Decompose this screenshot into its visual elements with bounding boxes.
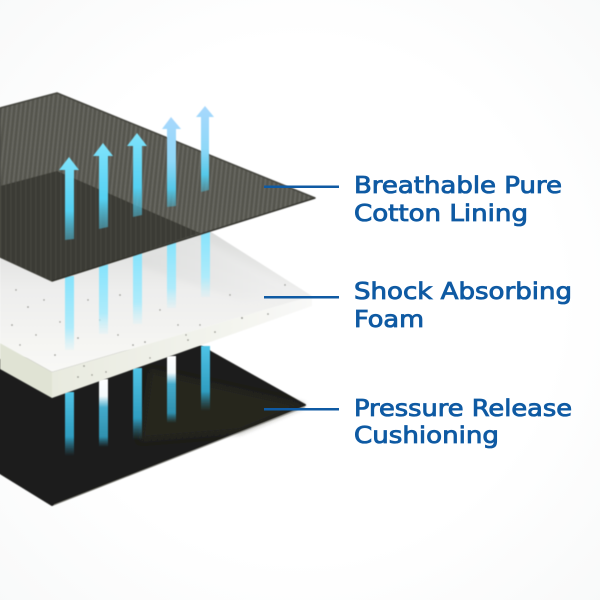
airflow arrows rising above the cotton — [59, 106, 214, 240]
arrow 3 — [127, 133, 147, 217]
label: shock absorbing foam — [354, 279, 572, 333]
callout line: cushioning — [264, 408, 339, 410]
label: shock absorbing foam: Foam — [354, 307, 424, 333]
label: breathable pure cotton lining — [354, 173, 562, 227]
airflow arrows through the foam — [65, 230, 210, 350]
arrow 2 — [93, 143, 113, 229]
callout line: cotton — [264, 186, 339, 188]
label: pressure release cushioning — [354, 396, 572, 449]
label: breathable pure cotton lining: Cotton Lining — [354, 201, 528, 227]
airflow arrows under the foam — [65, 346, 210, 456]
top layer: breathable pure cotton lining — [0, 93, 315, 281]
label: pressure release cushioning: Cushioning — [354, 423, 499, 449]
arrow 1 — [59, 157, 79, 240]
label: breathable pure cotton lining: Breathable Pure — [354, 173, 562, 199]
arrow 5 — [196, 106, 214, 192]
middle layer: shock absorbing foam — [0, 225, 312, 398]
foam speckles — [11, 284, 286, 378]
label: pressure release cushioning: Pressure Release — [354, 396, 572, 422]
bottom layer: pressure release cushioning — [0, 346, 305, 505]
arrow 4 — [162, 117, 181, 207]
label: shock absorbing foam: Shock Absorbing — [354, 279, 572, 305]
callout line: foam — [264, 296, 339, 298]
